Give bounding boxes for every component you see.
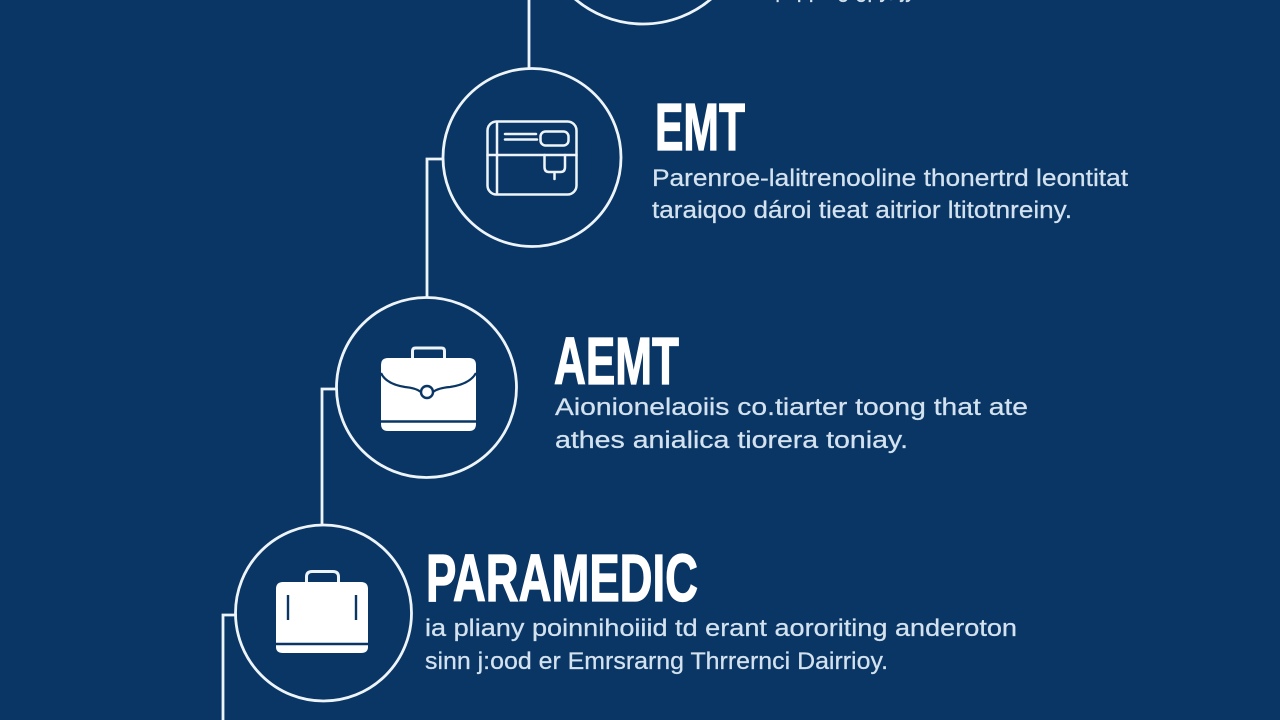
panel: AEMT [336, 298, 1028, 478]
connector: EMT to AEMT [427, 159, 443, 298]
icon: solid case [276, 572, 368, 653]
connector: AEMT to Paramedic [322, 389, 337, 525]
heading: PARAMEDIC: PARAMEDIC [426, 541, 698, 616]
text: AEMT description: athes anialica tiorera toniay. [555, 427, 908, 454]
icon: EMT case outline [488, 122, 576, 194]
text: AEMT description: Aionionelaoiis co.tiarter toong that ate [555, 394, 1028, 421]
icon ring: previous level [538, 0, 748, 24]
text: PARAMEDIC description: sinn j:ood er Emrsrarng Thrrernci Dairrioy. [425, 648, 888, 675]
panel: previous level, cropped at the top edge [538, 0, 916, 24]
text: EMT description: taraiqoo dároi tieat aitrior ltitotnreiny. [652, 197, 1072, 224]
text: AEMT description [555, 394, 1028, 454]
text: PARAMEDIC description: ia pliany poinnihoiiid td erant aororiting anderoton [425, 615, 1017, 642]
connector: previous level to EMT [528, 0, 530, 69]
heading: EMT: EMT [655, 90, 745, 165]
text: EMT description [652, 165, 1128, 224]
heading: AEMT: AEMT [554, 324, 679, 399]
icon ring: AEMT [336, 298, 516, 478]
connector: Paramedic to next level [223, 615, 237, 720]
text: PARAMEDIC description [425, 615, 1017, 675]
icon: briefcase with flap and clasp [381, 348, 476, 431]
panel: EMT [443, 68, 1128, 246]
text: EMT description: Parenroe-lalitrenooline thonertrd leontitat [652, 165, 1128, 192]
icon ring: EMT [443, 68, 621, 246]
panel: PARAMEDIC [236, 525, 1017, 701]
icon ring: PARAMEDIC [236, 525, 412, 701]
